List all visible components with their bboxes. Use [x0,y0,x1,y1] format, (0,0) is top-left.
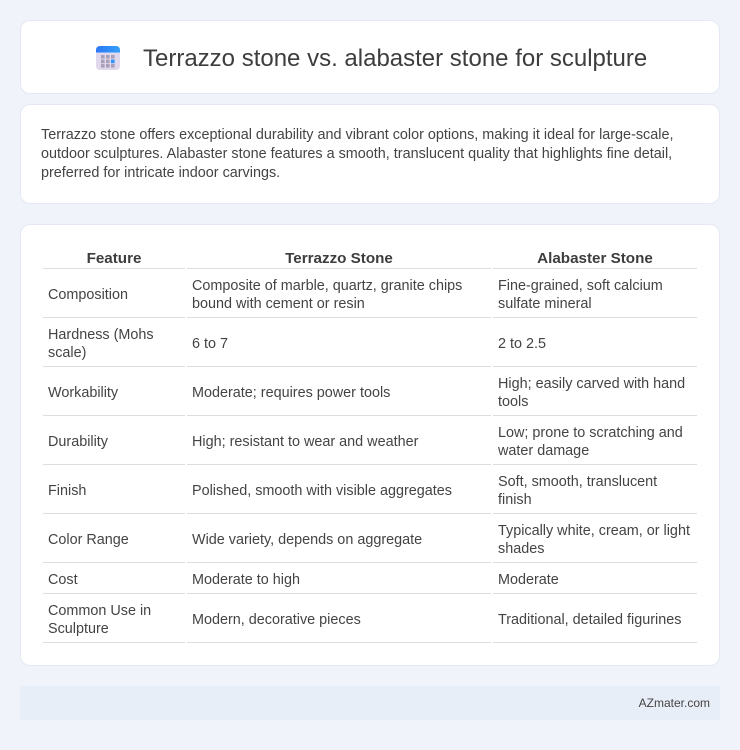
row: common use: Common Use in [48,603,151,619]
composition: terrazzo: bound with cement or resin [192,296,365,312]
row: finish: Finish [48,483,86,499]
row: hardness: Hardness (Mohs [48,327,154,343]
table header: alabaster stone: Alabaster Stone [537,250,653,267]
hardness: terrazzo: 6 to 7 [192,336,228,352]
common use: alabaster: Traditional, detailed figurines [498,612,681,628]
finish: alabaster: finish [498,492,532,508]
composition: terrazzo [192,278,462,312]
finish: alabaster [498,474,658,508]
finish: alabaster: Soft, smooth, translucent [498,474,657,490]
durability: alabaster: water damage [498,443,589,459]
row: common use: Sculpture [48,621,109,637]
workability: alabaster: High; easily carved with hand [498,376,685,392]
intro text [41,126,673,181]
cost: alabaster: Moderate [498,572,559,588]
hardness: alabaster: 2 to 2.5 [498,336,546,352]
color range: alabaster: Typically white, cream, or light [498,523,690,539]
icon: calendar [96,46,120,70]
durability: alabaster [498,425,683,459]
row: common use [48,603,151,637]
composition: alabaster: sulfate mineral [498,296,592,312]
durability: alabaster: Low; prone to scratching and [498,425,683,441]
table card [20,224,720,666]
intro card [20,104,720,204]
finish: terrazzo: Polished, smooth with visible aggregates [192,483,452,499]
intro text: Terrazzo stone offers exceptional durability and vibrant color options, making it ideal for large-scale, [41,126,673,142]
title: Terrazzo stone vs. alabaster stone for sculpture [143,45,647,72]
footer credit: AZmater.com [639,696,710,710]
workability: terrazzo: Moderate; requires power tools [192,385,390,401]
row: hardness [48,327,154,361]
intro text: outdoor sculptures. Alabaster stone features a smooth, translucent quality that highlights fine detail, [41,146,672,162]
color range: terrazzo: Wide variety, depends on aggregate [192,532,422,548]
cost: terrazzo: Moderate to high [192,572,300,588]
row: cost: Cost [48,572,78,588]
workability: alabaster: tools [498,394,528,410]
color range: alabaster: shades [498,541,544,557]
table header: terrazzo stone: Terrazzo Stone [285,250,393,267]
composition: alabaster [498,278,663,312]
title card [20,20,720,94]
row: durability: Durability [48,434,108,450]
common use: terrazzo: Modern, decorative pieces [192,612,361,628]
footer bar [20,686,720,720]
row: workability: Workability [48,385,118,401]
row: hardness: scale) [48,345,86,361]
row: color range: Color Range [48,532,129,548]
composition: alabaster: Fine-grained, soft calcium [498,278,663,294]
durability: terrazzo: High; resistant to wear and weather [192,434,418,450]
color range: alabaster [498,523,690,557]
composition: terrazzo: Composite of marble, quartz, granite chips [192,278,462,294]
row: composition: Composition [48,287,128,303]
table header: feature: Feature [87,250,141,267]
intro text: preferred for intricate indoor carvings. [41,165,280,181]
workability: alabaster [498,376,685,410]
